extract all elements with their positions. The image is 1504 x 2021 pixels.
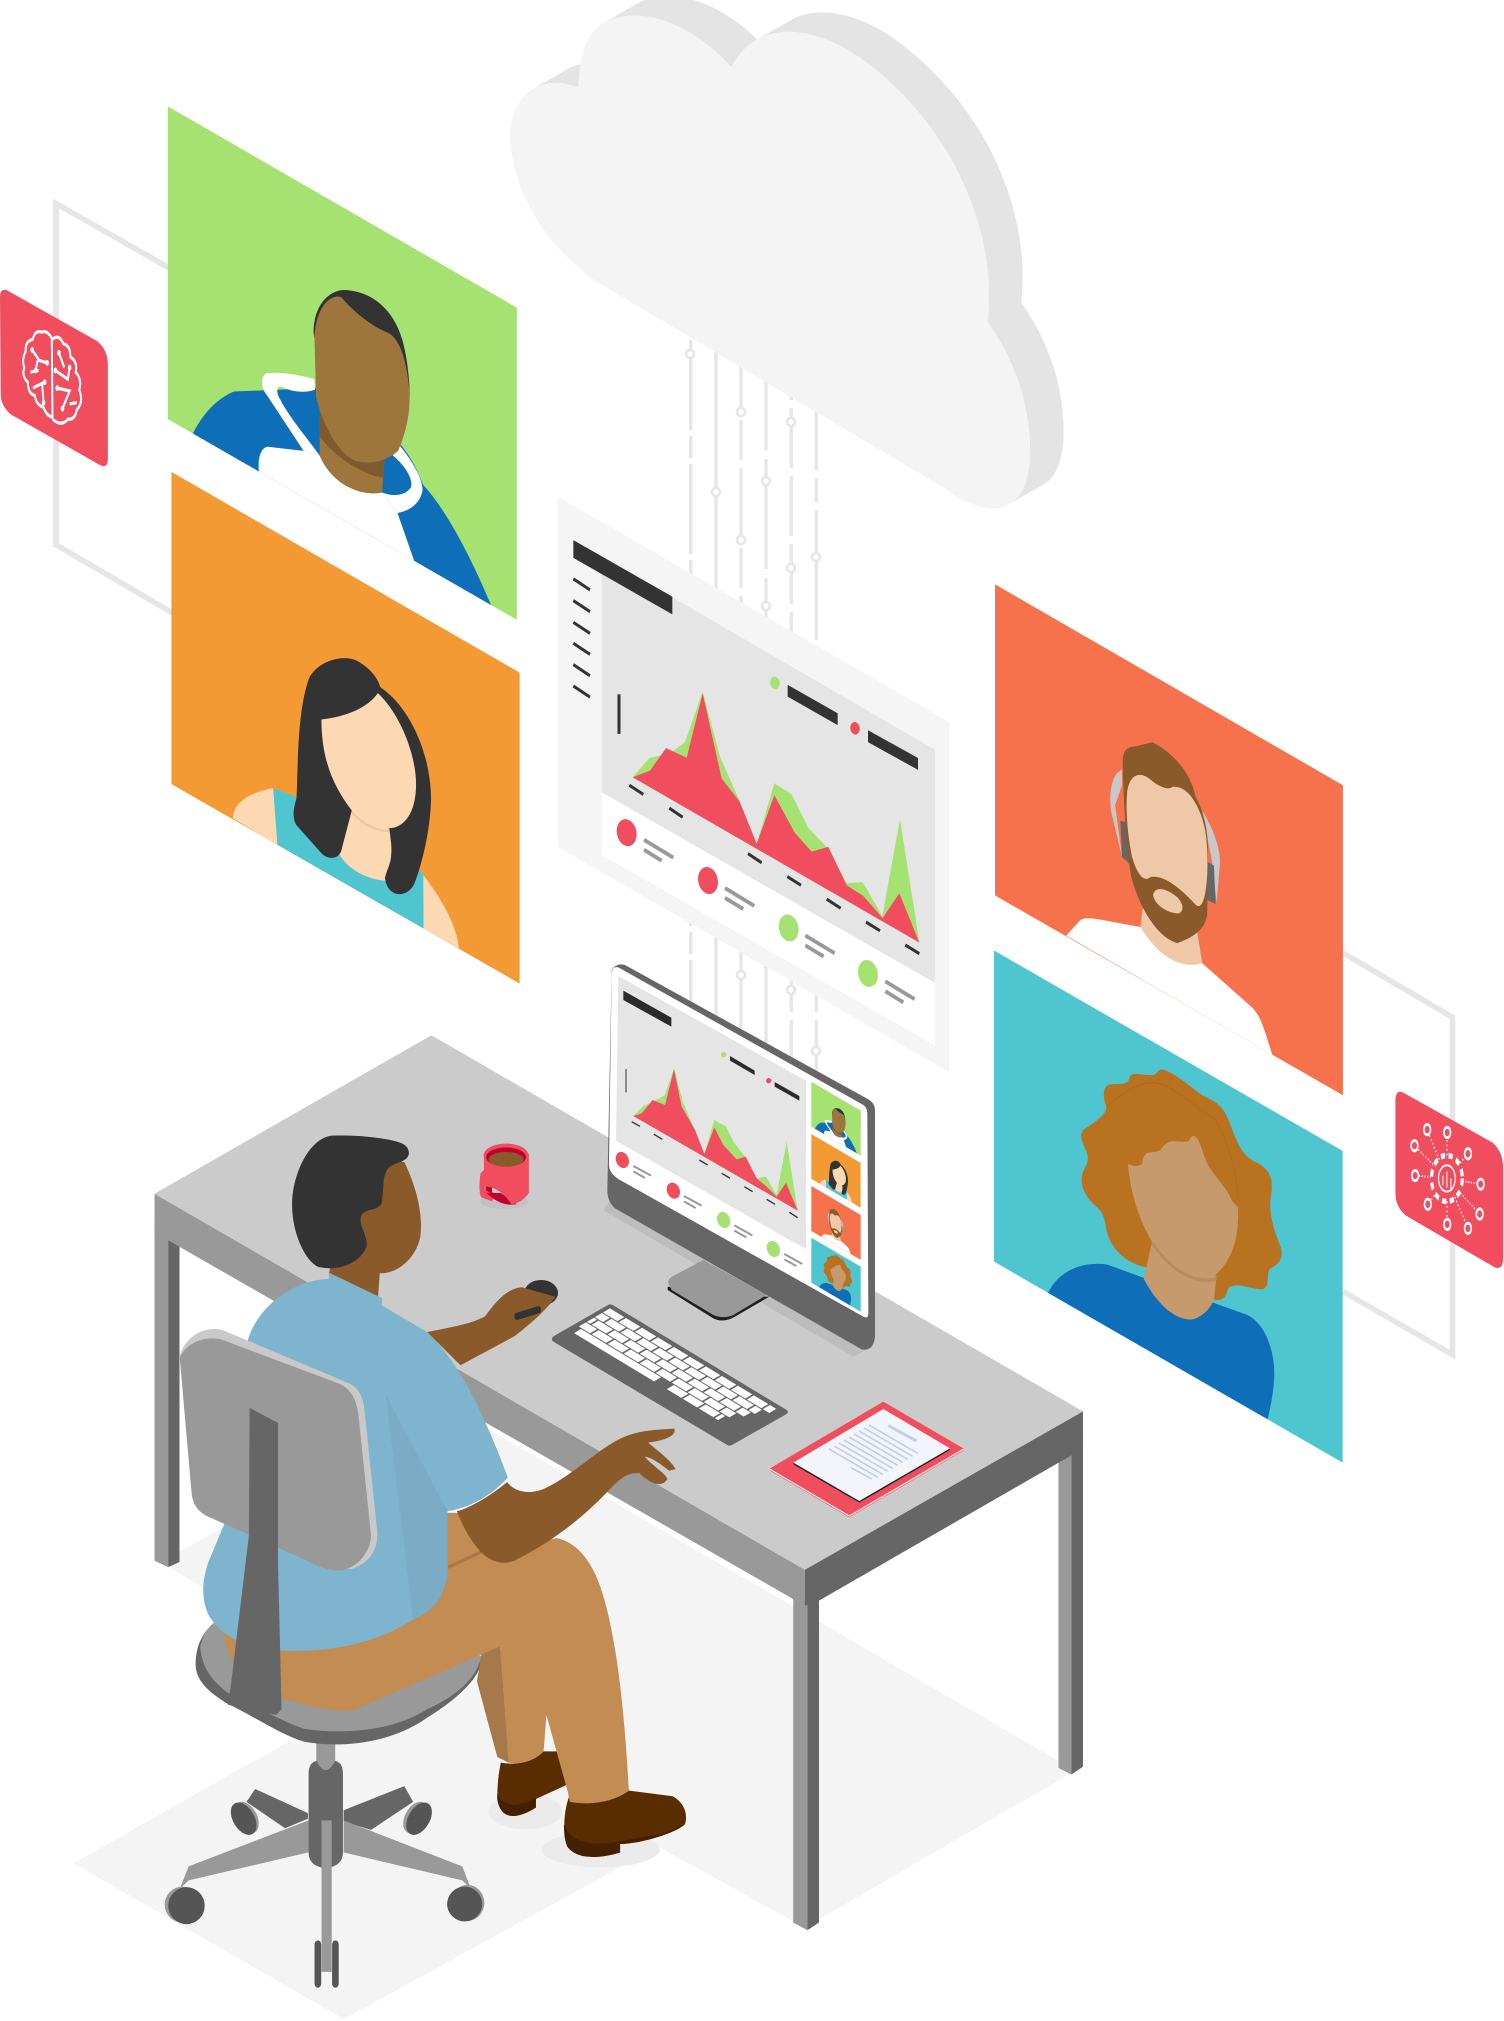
chair column — [309, 1740, 343, 1988]
icon badge: brain — [0, 290, 108, 466]
desk legs — [155, 1223, 1083, 1930]
document text lines — [888, 1426, 917, 1441]
video tile: woman with dark hair — [171, 472, 520, 984]
chair back post — [228, 1408, 282, 1715]
cloud — [510, 0, 1064, 508]
left wire frame — [56, 203, 173, 613]
sidebar ticks — [573, 579, 590, 697]
shoe shadows — [489, 1793, 660, 1868]
screen red series — [633, 1069, 798, 1211]
screen legend — [721, 1052, 799, 1101]
chair backrest — [180, 1329, 377, 1715]
screen title bar — [623, 991, 671, 1027]
red area series — [633, 694, 919, 943]
coffee mug — [479, 1144, 529, 1209]
screen y axis — [624, 1069, 627, 1092]
dashboard panel: floating chart — [558, 497, 949, 1072]
notebook with document — [770, 1402, 963, 1517]
screen thumbnail: orange tile — [811, 1134, 861, 1208]
office chair base — [165, 1619, 484, 1988]
chair seat — [196, 1619, 482, 1744]
screen thumbnail: teal tile — [811, 1238, 861, 1312]
video tiles right column — [994, 584, 1503, 1463]
screen thumbnail: coral tile — [811, 1186, 861, 1260]
screen stat items — [613, 1150, 802, 1266]
trousers — [222, 1513, 629, 1803]
left shoe — [497, 1751, 566, 1816]
screen green series — [633, 1068, 798, 1211]
monitor bezel — [609, 967, 868, 1317]
trouser shading — [477, 1646, 509, 1763]
desk top — [155, 1035, 1083, 1570]
seated person — [203, 1136, 686, 1868]
icon badge: AI gear network — [1395, 1092, 1503, 1268]
screen thumbnail: green tile — [811, 1082, 861, 1156]
mouse — [524, 1280, 558, 1306]
right wire frame — [1343, 953, 1453, 1355]
video tiles left column — [0, 106, 520, 984]
back chair legs — [227, 1786, 435, 1842]
right shoe — [564, 1791, 686, 1857]
floor shadow — [73, 1404, 1075, 2019]
shirt — [203, 1273, 508, 1651]
y axis label — [614, 694, 623, 734]
mouse front edge — [517, 1310, 539, 1316]
desk apron — [155, 1194, 805, 1606]
x axis ticks — [629, 785, 919, 954]
monitor stand — [668, 1260, 769, 1320]
dashboard title bar — [573, 540, 672, 614]
hair — [292, 1136, 409, 1268]
data stream lines — [686, 340, 820, 1140]
video tile: woman with curly hair — [994, 951, 1343, 1463]
bottom stat items — [613, 816, 915, 1002]
chart legend — [769, 675, 918, 770]
far arm — [427, 1287, 555, 1365]
front chair legs — [165, 1820, 484, 1924]
monitor shadow — [603, 1197, 873, 1357]
shirt shading — [386, 1395, 447, 1619]
screen chart area — [616, 976, 806, 1249]
keyboard — [552, 1304, 788, 1446]
near arm — [457, 1429, 675, 1563]
video tile: man in blue hoodie — [168, 106, 517, 620]
screen ticks — [632, 1122, 798, 1218]
monitor body — [607, 964, 875, 1350]
video tile: bearded man with headset — [995, 584, 1343, 1095]
desk — [155, 1035, 1083, 1930]
green area series — [633, 692, 919, 942]
computer monitor — [603, 964, 875, 1357]
waist fold — [448, 1551, 483, 1567]
head — [329, 1154, 421, 1297]
